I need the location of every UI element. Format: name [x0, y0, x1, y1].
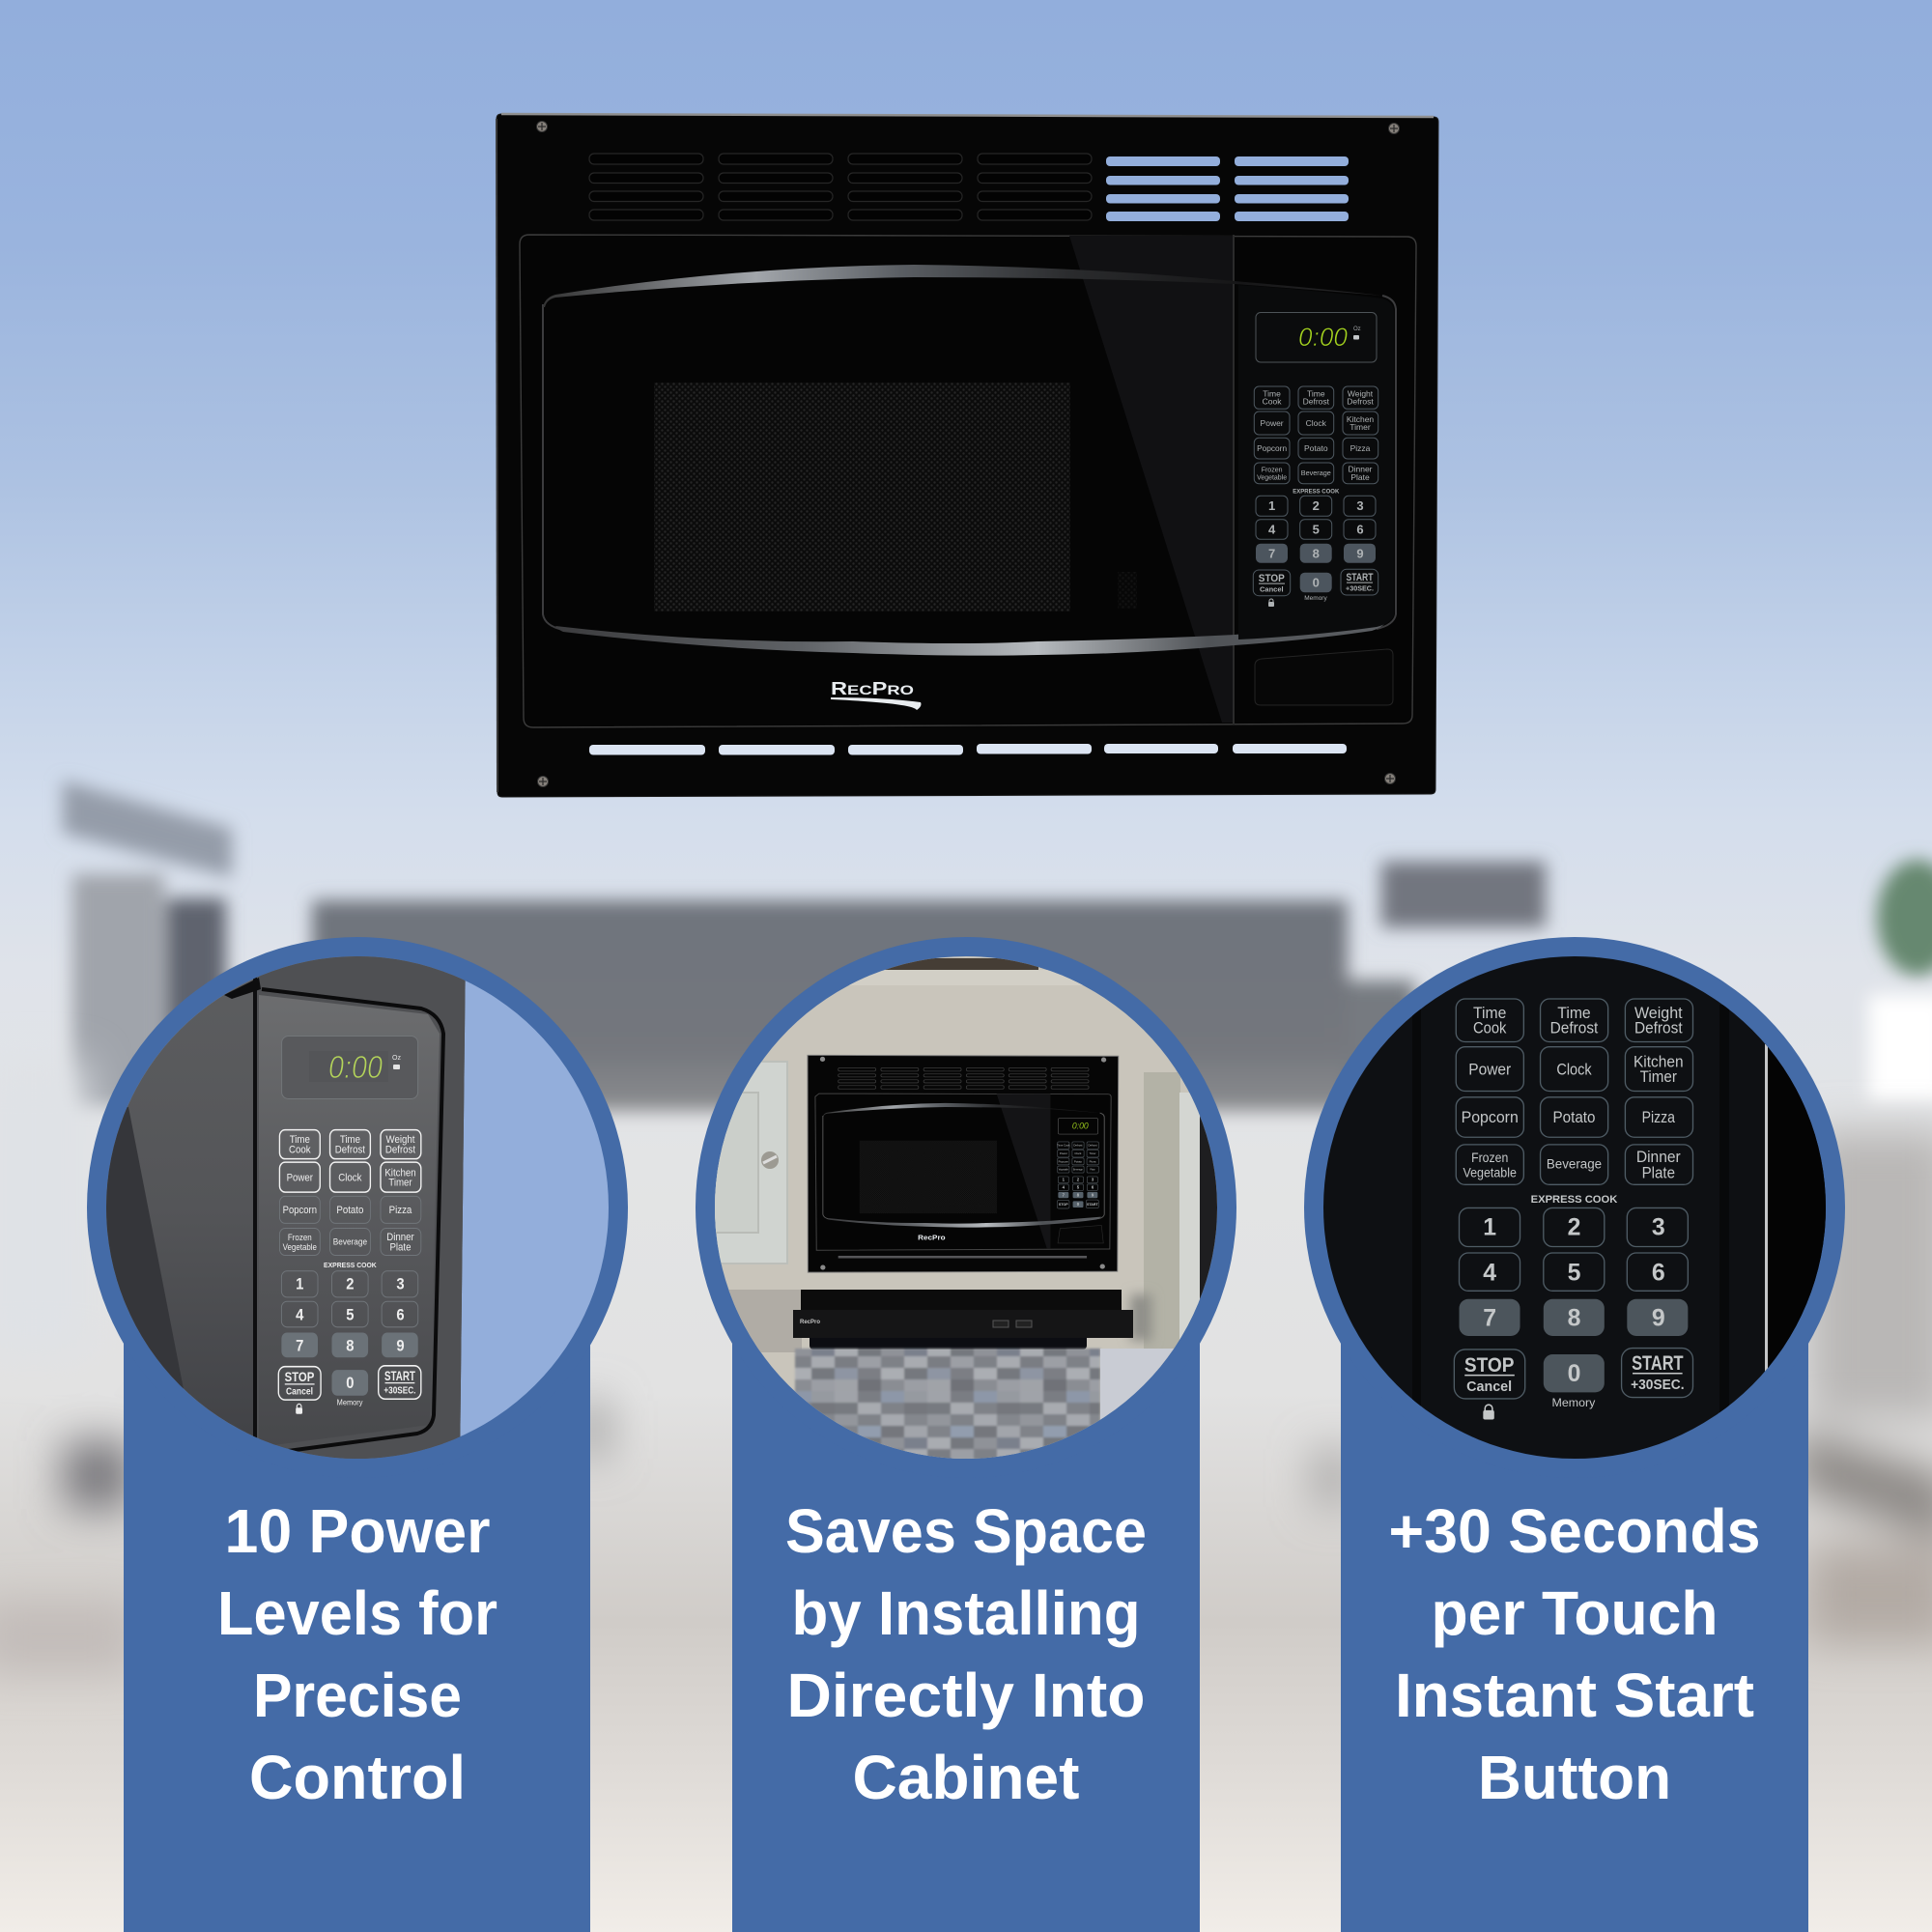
digital display	[1256, 313, 1377, 362]
keypad macro: Plate	[1642, 1164, 1675, 1181]
keypad: Dinner	[1348, 464, 1373, 473]
microwave trim frame	[497, 114, 1438, 797]
door glass reflection	[1069, 236, 1233, 723]
caption: 10 Power Levels for Precise Control: Precise	[253, 1661, 462, 1730]
display close-up: 0:00	[328, 1049, 384, 1085]
keypad close-up: Clock	[338, 1173, 362, 1184]
circle frame	[87, 937, 628, 1478]
keypad close-up: Pizza	[389, 1206, 412, 1216]
main product: RecPro microwave front	[497, 114, 1438, 797]
keypad close-up: EXPRESS COOK	[324, 1261, 377, 1269]
feature card 2: saves space	[696, 937, 1236, 1932]
keypad: Cancel	[1260, 585, 1284, 593]
keypad close-up: Power	[287, 1173, 314, 1184]
installed microwave: 8	[1077, 1192, 1080, 1197]
keypad macro: Clock	[1556, 1061, 1592, 1078]
keypad: START	[1347, 572, 1374, 583]
caption: 10 Power Levels for Precise Control: Control	[249, 1743, 466, 1812]
keypad close-up: Plate	[389, 1242, 412, 1254]
curved door trim	[543, 265, 1396, 656]
keypad close-up: Timer	[388, 1178, 412, 1189]
keypad: Kitchen	[1347, 414, 1374, 424]
caption: Saves Space by Installing Directly Into Cabinet: Directly Into	[786, 1661, 1146, 1730]
installed microwave: 6	[1092, 1185, 1094, 1190]
keypad macro: Time	[1557, 1005, 1591, 1022]
keypad macro: Timer	[1640, 1068, 1677, 1086]
feature card 3: +30 seconds	[1304, 937, 1845, 1932]
keypad macro: Dinner	[1636, 1149, 1681, 1166]
display close-up	[282, 1036, 418, 1099]
keypad: Beverage	[1301, 470, 1331, 477]
caption: 10 Power Levels for Precise Control	[217, 1496, 497, 1812]
keypad close-up: Time	[290, 1135, 310, 1146]
keypad macro: Potato	[1553, 1109, 1595, 1126]
keypad: Frozen	[1262, 468, 1283, 473]
microwave door body	[520, 235, 1416, 727]
keypad: Time	[1307, 388, 1325, 398]
keypad: Time	[1263, 388, 1281, 398]
installed microwave: Pizza	[1090, 1159, 1096, 1163]
keypad close-up: Defrost	[385, 1145, 415, 1156]
installed microwave: Clock	[1074, 1151, 1082, 1155]
caption: +30 Seconds per Touch Instant Start Button: per Touch	[1432, 1578, 1718, 1648]
installed microwave: 0	[1077, 1202, 1080, 1207]
installed microwave: 9	[1092, 1192, 1094, 1197]
keypad: Potato	[1304, 443, 1328, 453]
keypad macro: 1	[1483, 1214, 1496, 1240]
installed microwave: Plate	[1090, 1169, 1095, 1172]
caption: Saves Space by Installing Directly Into Cabinet: Cabinet	[852, 1743, 1080, 1812]
bottom vent slots	[589, 744, 1347, 755]
keypad macro: Frozen	[1471, 1151, 1508, 1165]
installed microwave: Time Cook	[1057, 1144, 1070, 1147]
digital display: Oz	[1353, 327, 1361, 332]
keypad close-up: 5	[346, 1307, 355, 1324]
keypad close-up: 8	[346, 1338, 355, 1355]
feature card 1: power levels	[87, 937, 628, 1932]
installed microwave: Beverage	[1073, 1169, 1084, 1172]
keypad close-up: 0	[346, 1375, 355, 1392]
keypad macro: EXPRESS COOK	[1531, 1194, 1618, 1206]
keypad close-up: Frozen	[288, 1232, 312, 1242]
keypad close-up: Popcorn	[283, 1206, 317, 1216]
under-cabinet range hood: RecPro	[800, 1320, 820, 1325]
digital display: 0:00	[1298, 323, 1348, 352]
installed microwave: Timer	[1089, 1151, 1096, 1155]
blue card column	[124, 1343, 590, 1932]
keypad: Pizza	[1350, 443, 1371, 453]
installed microwave: Potato	[1074, 1159, 1082, 1163]
keypad macro: 7	[1483, 1306, 1496, 1332]
keypad macro: Kitchen	[1634, 1054, 1684, 1071]
caption: Saves Space by Installing Directly Into Cabinet: Saves Space	[785, 1496, 1147, 1566]
keypad macro: +30SEC.	[1631, 1378, 1685, 1393]
circle frame	[696, 937, 1236, 1478]
control panel	[1238, 285, 1394, 639]
keypad macro: Weight	[1634, 1005, 1683, 1022]
frame screws	[537, 122, 1399, 786]
caption: +30 Seconds per Touch Instant Start Button: +30 Seconds	[1389, 1496, 1760, 1566]
display close-up: Oz	[392, 1055, 401, 1062]
caption: Saves Space by Installing Directly Into Cabinet	[785, 1496, 1147, 1812]
keypad: Popcorn	[1257, 443, 1287, 453]
keypad close-up: 4	[296, 1307, 304, 1324]
keypad: 8	[1313, 546, 1320, 560]
keypad macro: 0	[1568, 1361, 1580, 1387]
keypad macro: 4	[1483, 1261, 1496, 1287]
keypad close-up: START	[384, 1368, 415, 1383]
installed microwave: STOP	[1059, 1203, 1068, 1207]
keypad macro	[1454, 999, 1693, 1419]
keypad macro: 6	[1652, 1261, 1665, 1287]
keypad macro: Cook	[1473, 1019, 1507, 1037]
keypad close-up: Beverage	[333, 1236, 367, 1246]
circular photo: microwave installed in cabinet	[710, 952, 1222, 1468]
keypad close-up: +30SEC.	[384, 1385, 415, 1396]
installed microwave: RecPro	[918, 1235, 946, 1241]
keypad close-up: Weight	[386, 1135, 415, 1146]
keypad: Cook	[1263, 396, 1282, 406]
installed microwave: 1	[1063, 1178, 1065, 1182]
caption: 10 Power Levels for Precise Control: 10 Power	[224, 1496, 491, 1566]
keypad macro: 9	[1652, 1306, 1665, 1332]
keypad close-up: Vegetable	[283, 1242, 317, 1252]
keypad: Defrost	[1303, 396, 1330, 406]
microwave window mesh	[654, 383, 1137, 611]
installed microwave: 2	[1077, 1178, 1080, 1182]
keypad: Timer	[1350, 422, 1371, 432]
keypad: Vegetable	[1257, 475, 1287, 481]
circle frame	[1304, 937, 1845, 1478]
keypad macro: START	[1632, 1352, 1684, 1375]
under-cabinet range hood	[793, 1290, 1151, 1350]
keypad close-up: 3	[396, 1276, 405, 1293]
keypad: +30SEC.	[1346, 583, 1374, 593]
installed microwave: 3	[1092, 1178, 1094, 1182]
top vent slots	[589, 154, 1349, 221]
keypad close-up: 6	[396, 1307, 405, 1324]
keypad macro: Popcorn	[1462, 1109, 1519, 1126]
keypad: STOP	[1259, 573, 1285, 584]
keypad macro: Time	[1473, 1005, 1506, 1022]
caption: Saves Space by Installing Directly Into Cabinet: by Installing	[792, 1578, 1140, 1648]
keypad close-up: Defrost	[335, 1145, 365, 1156]
keypad close-up: Cancel	[286, 1386, 313, 1397]
keypad: Weight	[1348, 388, 1374, 398]
door and control panel divider	[1233, 235, 1235, 724]
caption: +30 Seconds per Touch Instant Start Button: Instant Start	[1395, 1661, 1754, 1730]
keypad close-up: Cook	[289, 1145, 311, 1156]
keypad: Plate	[1350, 472, 1370, 482]
installed microwave: 0:00	[1072, 1122, 1089, 1131]
keypad macro: Vegetable	[1463, 1165, 1517, 1179]
circular photo: keypad macro	[1319, 952, 1835, 1463]
keypad macro: Memory	[1552, 1396, 1596, 1409]
keypad: 0	[1313, 575, 1320, 589]
keypad macro: 8	[1568, 1306, 1581, 1332]
keypad macro: STOP	[1464, 1354, 1514, 1377]
blue card column	[732, 1343, 1200, 1932]
keypad close-up: Kitchen	[384, 1168, 416, 1179]
keypad close-up: 9	[396, 1338, 405, 1355]
keypad macro: 5	[1568, 1261, 1581, 1287]
keypad	[1253, 386, 1378, 607]
keypad close-up: Memory	[337, 1398, 362, 1407]
beige backsplash strip	[724, 1290, 802, 1352]
installed microwave	[808, 1055, 1119, 1272]
keypad close-up: Dinner	[386, 1232, 414, 1243]
circular photo: control panel close-up	[97, 947, 618, 1468]
keypad: Clock	[1306, 418, 1327, 428]
installed microwave: 7	[1063, 1192, 1065, 1197]
installed microwave: Defrost	[1089, 1144, 1097, 1147]
keypad: Defrost	[1347, 396, 1374, 406]
keypad close-up: 2	[346, 1276, 355, 1293]
cabinet door with knob	[710, 1062, 787, 1264]
RecPro logo: R EC P RO	[831, 679, 914, 698]
installed microwave: Popcorn	[1059, 1159, 1069, 1163]
keypad: Power	[1261, 418, 1284, 428]
keypad macro: Pizza	[1642, 1109, 1676, 1126]
caption: +30 Seconds per Touch Instant Start Button	[1389, 1496, 1760, 1812]
keypad: 9	[1356, 546, 1364, 560]
installed microwave: Power	[1060, 1151, 1067, 1155]
keypad close-up: STOP	[285, 1369, 314, 1384]
keypad macro: Cancel	[1466, 1379, 1512, 1395]
keypad macro: Defrost	[1550, 1019, 1599, 1037]
lower right panel recess	[1255, 649, 1393, 705]
installed microwave: START	[1087, 1203, 1099, 1207]
keypad macro: Defrost	[1634, 1019, 1683, 1037]
keypad: 3	[1356, 498, 1364, 513]
keypad close-up: Potato	[336, 1206, 364, 1216]
metallic tile backsplash	[795, 1349, 1100, 1468]
blue card column	[1341, 1343, 1808, 1932]
keypad close-up	[278, 1130, 421, 1414]
keypad macro: Beverage	[1547, 1157, 1602, 1172]
RecPro logo	[831, 679, 922, 710]
keypad: 2	[1313, 498, 1320, 513]
keypad: EXPRESS COOK	[1293, 489, 1340, 495]
installed microwave: 4	[1063, 1185, 1065, 1190]
keypad: 1	[1268, 498, 1275, 513]
installed microwave: Defrost	[1073, 1144, 1083, 1147]
keypad close-up: Time	[340, 1135, 360, 1146]
keypad macro: 2	[1568, 1214, 1580, 1240]
keypad: 5	[1313, 523, 1320, 537]
installed microwave: Vegetable	[1059, 1169, 1069, 1172]
keypad close-up: 7	[296, 1338, 304, 1355]
keypad: 7	[1268, 546, 1275, 560]
keypad close-up: 1	[296, 1276, 304, 1293]
caption: 10 Power Levels for Precise Control: Levels for	[217, 1578, 497, 1648]
installed microwave: 5	[1077, 1185, 1080, 1190]
keypad: 6	[1356, 523, 1364, 537]
right wall below cabinet	[1100, 1349, 1174, 1420]
keypad macro: Power	[1468, 1061, 1512, 1078]
caption: +30 Seconds per Touch Instant Start Button: Button	[1478, 1743, 1671, 1812]
keypad: Memory	[1304, 595, 1327, 602]
keypad: 4	[1268, 523, 1276, 537]
keypad macro: 3	[1652, 1214, 1665, 1240]
